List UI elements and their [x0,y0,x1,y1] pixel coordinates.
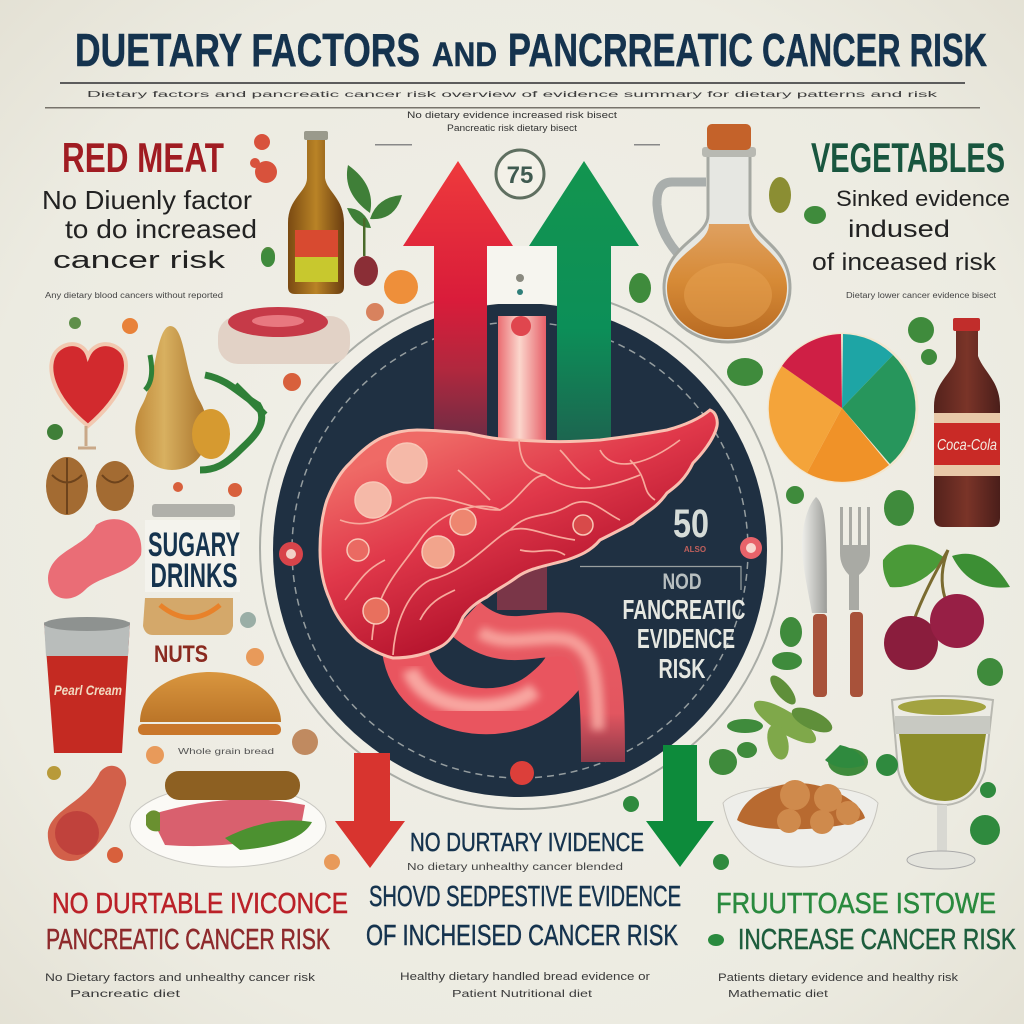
icon: raw steak on plate [218,307,350,364]
icon: carrots and garnish [261,247,418,321]
illustration: duct tube [497,316,547,610]
title: DUETARY FACTORS [75,24,420,76]
icon: green leaves cluster [261,177,1003,776]
heading: bottom centre: Patient Nutritional diet [452,989,592,1000]
panel: red meat text: to do increased [65,214,257,244]
panel: vegetables text: of inceased risk [812,249,997,276]
icon: pear [135,326,230,470]
panel: vegetables text [811,134,1010,300]
icon: chili garnish [250,134,277,183]
heading: bottom right [708,888,1017,1000]
heading: bottom centre: SHOVD SEDPESTIVE EVIDENCE [369,881,681,913]
heading: bottom left: No Dietary factors and unhealthy cancer risk [45,972,316,984]
icon: steak cut left [48,766,126,861]
arrow: green up [529,161,639,440]
icon: fork [840,507,870,697]
text: pancreatic evidence label: ALSO [684,545,706,554]
icon: small food bits left [47,317,340,870]
text: bun caption: Whole grain bread [178,747,274,756]
icon: bread bun [138,672,281,735]
icon: cola bottle [934,318,1000,527]
icon: herb sprig [145,355,265,470]
arrow: green down [646,745,714,867]
heading: bottom centre [366,827,681,1000]
arrow: red up [403,161,513,440]
arrow: red down [335,753,405,868]
text: pancreatic evidence label: RISK [658,653,706,684]
icon: heart [51,344,126,448]
icon: walnuts [46,457,134,515]
icon: sauce bottle [288,131,344,294]
icon: red cup: Pearl Cream [54,682,122,698]
text: nuts label: NUTS [154,641,208,668]
icon: glass oil carafe [657,124,790,342]
title rule and fine print: No dietary evidence increased risk bisect [407,110,618,120]
panel: red meat text: RED MEAT [62,134,224,181]
text: pancreatic evidence label [580,502,746,684]
panel: red meat text: cancer risk [53,247,226,274]
icon: sandwich on plate [130,771,326,867]
illustration: intestine loops [405,618,603,762]
icon: herb garnish right [623,745,1000,870]
panel: red meat text: No Diuenly factor [42,185,252,215]
title: PANCRREATIC [508,24,753,76]
panel: vegetables text: Sinked evidence [836,186,1010,211]
icon: wine glass [892,696,993,869]
icon: knife [802,497,827,697]
title rule and fine print [45,82,980,146]
icon: leafy sprig top [347,165,402,286]
text: pancreatic evidence label: FANCREATIC [622,594,746,625]
icon: cherries [883,544,1010,670]
panel: red meat text: Any dietary blood cancers without reported [45,291,223,300]
heading: bottom left [45,888,348,1000]
panel: sugary drinks label [143,504,240,635]
icon: small round badge: 75 [507,162,533,189]
panel: vegetables text: indused [848,216,950,243]
heading: bottom right: Mathematic diet [728,989,828,1000]
heading: bottom centre: NO DURTARY IVIDENCE [410,827,644,857]
title [75,24,987,76]
icon: peas [749,672,836,762]
icon: small round badge [496,150,544,295]
heading: bottom right: Patients dietary evidence and healthy risk [718,972,959,984]
illustration: pancreas [320,410,717,658]
chart: pie [768,332,918,484]
panel: red meat text [42,134,257,300]
heading: bottom centre: No dietary unhealthy cancer blended [407,862,623,873]
panel: sugary drinks label: DRINKS [150,557,238,595]
title rule and fine print: Dietary factors and pancreatic cancer risk overview of evidence summary for dietary patterns and risk [87,90,939,99]
icon: raw meat slab [48,519,141,599]
heading: bottom left: NO DURTABLE IVICONCE [52,888,348,920]
chart: central dark circle [260,287,782,809]
text: pancreatic evidence label: NOD [662,569,702,594]
icon: cola bottle: Coca-Cola [937,437,997,454]
icon: red cup [44,617,130,753]
title: AND [432,36,497,74]
title rule and fine print: Pancreatic risk dietary bisect [447,123,578,133]
heading: bottom centre: OF INCHEISED CANCER RISK [366,920,678,952]
heading: bottom centre: Healthy dietary handled bread evidence or [400,971,650,983]
panel: vegetables text: Dietary lower cancer evidence bisect [846,291,997,300]
heading: bottom left: PANCREATIC CANCER RISK [46,924,330,956]
panel: sugary drinks label: SUGARY [148,526,240,564]
icon: bowl of nuts [723,780,878,867]
text: pancreatic evidence label: 50 [673,502,709,546]
heading: bottom left: Pancreatic diet [70,989,180,1000]
panel: gap between arrows [487,246,557,304]
text: pancreatic evidence label: EVIDENCE [637,623,735,654]
